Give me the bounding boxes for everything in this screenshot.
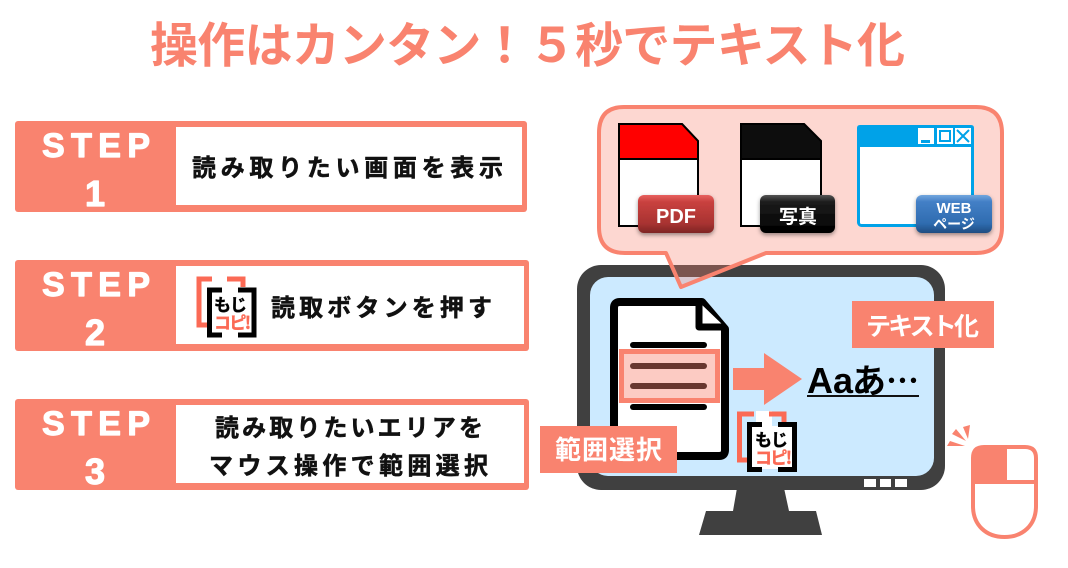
label: range selection [540, 426, 677, 473]
step 2 text: 読取ボタンを押す [271, 288, 492, 323]
step 2 label [42, 266, 150, 353]
icon: moji copy logo: コピ! [214, 309, 251, 334]
panel: step 3 [15, 399, 529, 492]
panel: monitor [540, 265, 994, 535]
badge: web page [916, 195, 992, 234]
output text: … [886, 355, 919, 403]
panel: step 1 [15, 121, 527, 214]
icon: PDF file [619, 124, 714, 233]
title: 操作はカンタン！５秒でテキスト化 [150, 6, 905, 76]
badge: PDF: PDF [656, 206, 696, 228]
arrow [733, 353, 802, 405]
panel: step 2 [15, 260, 529, 353]
step 3 label: 3 [85, 451, 105, 492]
label: text conversion: テキスト化 [866, 307, 979, 343]
badge: web page: ページ [933, 214, 975, 234]
step 3 label [42, 405, 150, 492]
selection highlight [622, 352, 718, 400]
icon: web window [857, 125, 992, 234]
label: text conversion [852, 301, 994, 348]
icon: moji copy logo on screen: コピ! [755, 444, 792, 469]
icon: document [614, 302, 725, 456]
badge: photo: 写真 [779, 202, 817, 229]
label: range selection: 範囲選択 [555, 430, 662, 467]
monitor screen [590, 277, 934, 476]
step 1 label: STEP [42, 127, 150, 165]
icon: moji copy logo on screen: もじ [755, 426, 788, 451]
icon: moji copy logo on screen [740, 411, 794, 470]
badge: web page: WEB [936, 200, 972, 217]
output text: Aa [807, 360, 853, 401]
step 3 text [209, 408, 488, 481]
step 3 text: 読み取りたいエリアを [215, 408, 483, 443]
panel: speech bubble [599, 107, 1002, 287]
monitor stand [699, 488, 822, 535]
icon: moji copy logo: もじ [214, 291, 247, 316]
step 1 label [42, 127, 150, 214]
step 1 text: 読み取りたい画面を表示 [192, 148, 503, 183]
step 3 label: STEP [42, 405, 150, 443]
output text: あ [852, 354, 886, 403]
step 3 text: マウス操作で範囲選択 [209, 446, 488, 481]
step 2 label: 2 [85, 312, 105, 353]
step 1 label: 1 [85, 173, 105, 214]
icon: moji copy logo [199, 279, 254, 335]
monitor body [577, 265, 945, 490]
click burst [947, 425, 970, 446]
monitor buttons [864, 479, 907, 487]
step 2 label: STEP [42, 266, 150, 304]
icon: photo file [741, 124, 835, 233]
icon: mouse [947, 425, 1036, 537]
output text [807, 354, 919, 403]
